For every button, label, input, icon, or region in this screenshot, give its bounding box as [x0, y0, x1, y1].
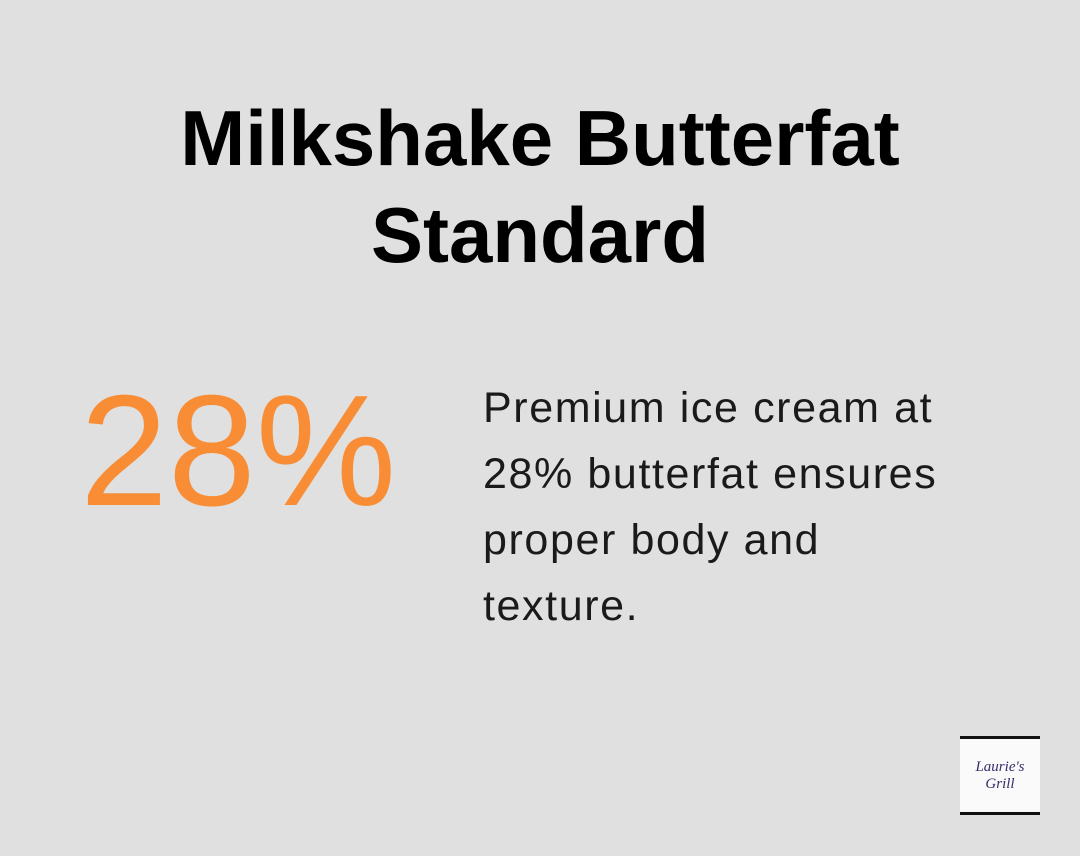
- description: [483, 384, 937, 630]
- title: [180, 94, 900, 279]
- logo: Grill: [985, 776, 1015, 792]
- big stat: 28%: [80, 363, 396, 539]
- title: Milkshake Butterfat: [180, 94, 900, 182]
- title: Standard: [371, 191, 709, 279]
- description: texture.: [483, 582, 639, 630]
- logo: [960, 736, 1040, 815]
- description: 28% butterfat ensures: [483, 450, 937, 498]
- description: Premium ice cream at: [483, 384, 933, 432]
- description: proper body and: [483, 516, 820, 564]
- logo: Laurie's: [975, 759, 1025, 775]
